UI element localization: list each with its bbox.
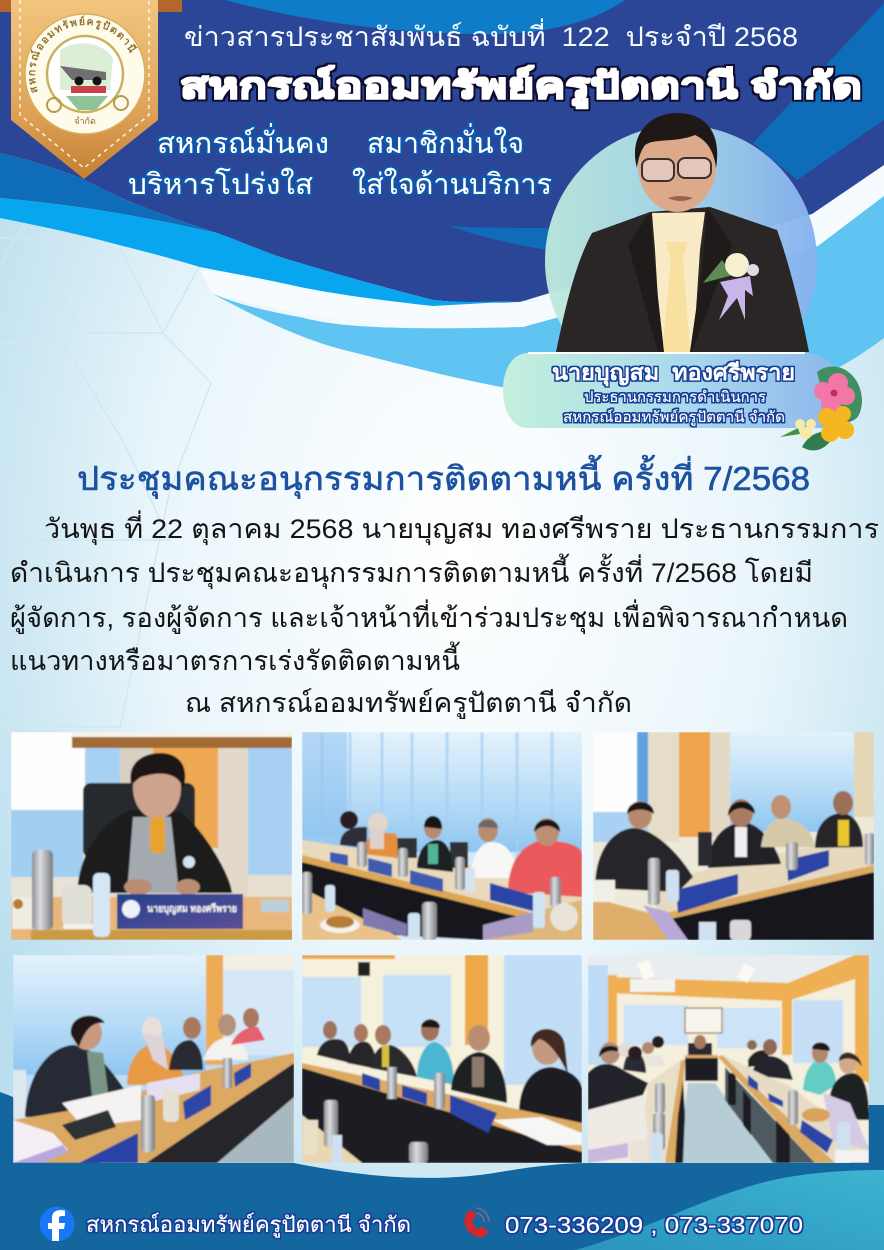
facebook page name: สหกรณ์ออมทรัพย์ครูปัตตานี จำกัด	[86, 1212, 411, 1238]
lower left table	[302, 888, 402, 940]
orange fascia	[608, 955, 869, 1083]
light blue band	[213, 196, 884, 395]
side curtain	[588, 965, 608, 1065]
main title: สหกรณ์ออมทรัพย์ครูปัตตานี จำกัด	[180, 65, 862, 109]
screen	[685, 1008, 722, 1033]
dark table front	[146, 1063, 294, 1163]
ceiling	[588, 955, 855, 983]
photo 3: committee members right table	[593, 732, 874, 940]
ribbon badge with co-op logo	[0, 0, 182, 179]
table surface	[302, 839, 582, 914]
issue line: ข่าวสารประชาสัมพันธ์ ฉบับที่ 122 ประจำปี 2568	[184, 18, 798, 52]
table edge	[657, 865, 874, 922]
footer band	[0, 1092, 884, 1250]
portrait of chairman	[545, 113, 817, 397]
corsage	[703, 253, 759, 320]
chair	[83, 783, 195, 858]
shirt	[652, 212, 705, 352]
logo seal	[24, 13, 146, 135]
article body	[10, 510, 879, 719]
lower left corner	[302, 1115, 362, 1163]
papers	[62, 1085, 141, 1127]
article body: ณ สหกรณ์ออมทรัพย์ครูปัตตานี จำกัด	[185, 687, 632, 719]
photo 2: committee members left table	[302, 732, 582, 940]
logo seal: จำกัด	[74, 116, 96, 126]
calculator	[62, 1110, 116, 1140]
icon: tropical flowers	[780, 367, 862, 450]
thermoses and bottles	[302, 872, 312, 914]
photo 1: chairman speaking	[11, 732, 301, 940]
right people	[748, 1050, 770, 1067]
article body: ผู้จัดการ, รองผู้จัดการ และเจ้าหน้าที่เข้าร่วมประชุม เพื่อพิจารณากำหนด	[10, 599, 848, 635]
carpet	[677, 1083, 773, 1163]
icon: telephone	[465, 1208, 489, 1238]
decorative hexagons	[0, 223, 211, 727]
phone numbers: 073-336209 , 073-337070	[505, 1212, 803, 1238]
thermoses	[648, 858, 660, 905]
article body: แนวทางหรือมาตรการเร่งรัดติดตามหนี้	[10, 641, 460, 676]
slogan: สมาชิกมั่นใจ	[367, 123, 524, 160]
left people	[588, 1064, 648, 1110]
slogan	[128, 123, 552, 201]
ribbon top bar	[0, 0, 182, 12]
person at head table	[688, 1043, 712, 1057]
name: นายบุญสม ทองศรีพราย	[552, 360, 795, 387]
photo 4: members at table, view along table	[13, 955, 294, 1163]
suit	[556, 207, 809, 352]
thermos	[32, 850, 53, 930]
slogan: บริหารโปร่งใส	[128, 167, 313, 201]
right table dark front	[725, 1067, 815, 1163]
photo 1: chairman speaking: นายบุญสม ทองศรีพราย	[147, 902, 237, 916]
name plate	[117, 894, 243, 929]
right table items	[823, 1093, 869, 1150]
thermos	[141, 1095, 155, 1152]
bright blue band left	[0, 198, 540, 306]
left table	[665, 1060, 685, 1163]
top blue band	[225, 0, 625, 34]
table surface	[653, 832, 874, 915]
people	[25, 1045, 135, 1120]
name plate	[503, 353, 842, 428]
tie	[662, 242, 690, 352]
head table	[685, 1057, 718, 1081]
name plates	[450, 1095, 497, 1133]
organisation: สหกรณ์ออมทรัพย์ครูปัตตานี จำกัด	[563, 409, 785, 426]
article body: ดำเนินการ ประชุมคณะอนุกรรมการติดตามหนี้ ครั้งที่ 7/2568 โดยมี	[10, 553, 813, 590]
lapels	[628, 212, 664, 352]
right table	[483, 900, 582, 940]
speaker	[77, 810, 232, 893]
right blue band	[753, 3, 884, 180]
slogan: สหกรณ์มั่นคง	[157, 123, 329, 160]
ribbon	[11, 0, 158, 179]
air conditioner	[630, 979, 675, 992]
photo 6: wide view of meeting room	[588, 955, 869, 1163]
name plates	[79, 1133, 138, 1163]
table edge	[302, 855, 529, 919]
desk	[11, 897, 292, 940]
logo seal: สหกรณ์ออมทรัพย์ครูปัตตานี	[28, 16, 138, 94]
curtains	[624, 1005, 688, 1045]
header wave background	[0, 0, 884, 395]
navy field	[0, 0, 884, 303]
icon: facebook	[40, 1206, 74, 1242]
footer contact row	[40, 1206, 803, 1242]
photo 5: members at table, opposite side	[302, 955, 582, 1163]
wedge of blue behind portrait	[450, 226, 560, 252]
white wave	[200, 165, 884, 327]
chairs	[395, 838, 417, 858]
table top	[302, 1063, 582, 1152]
glasses	[642, 158, 711, 181]
article heading: ประชุมคณะอนุกรรมการติดตามหนี้ ครั้งที่ 7/2568	[77, 455, 810, 499]
position: ประธานกรรมการดำเนินการ	[584, 389, 766, 406]
floor	[216, 1096, 294, 1163]
mid blue band left	[0, 153, 217, 233]
seated people	[340, 827, 367, 848]
thermos	[434, 1073, 445, 1109]
head	[638, 118, 716, 212]
hands	[124, 879, 152, 895]
name plates	[676, 874, 738, 913]
name plates	[330, 852, 348, 866]
article body: วันพุธ ที่ 22 ตุลาคม 2568 นายบุญสม ทองศรีพราย ประธานกรรมการ	[44, 510, 879, 546]
chairs	[698, 832, 712, 866]
people	[595, 828, 693, 892]
slogan: ใส่ใจด้านบริการ	[352, 167, 552, 201]
table top	[13, 1053, 294, 1163]
black table front	[302, 1067, 582, 1163]
black table front	[657, 872, 874, 940]
left table	[593, 901, 668, 940]
left table items	[588, 1095, 648, 1163]
hair	[635, 113, 717, 168]
black table front	[302, 862, 529, 940]
mouth	[668, 196, 693, 201]
portrait disc	[545, 125, 817, 397]
people	[317, 1039, 350, 1063]
right table top	[718, 1055, 835, 1163]
